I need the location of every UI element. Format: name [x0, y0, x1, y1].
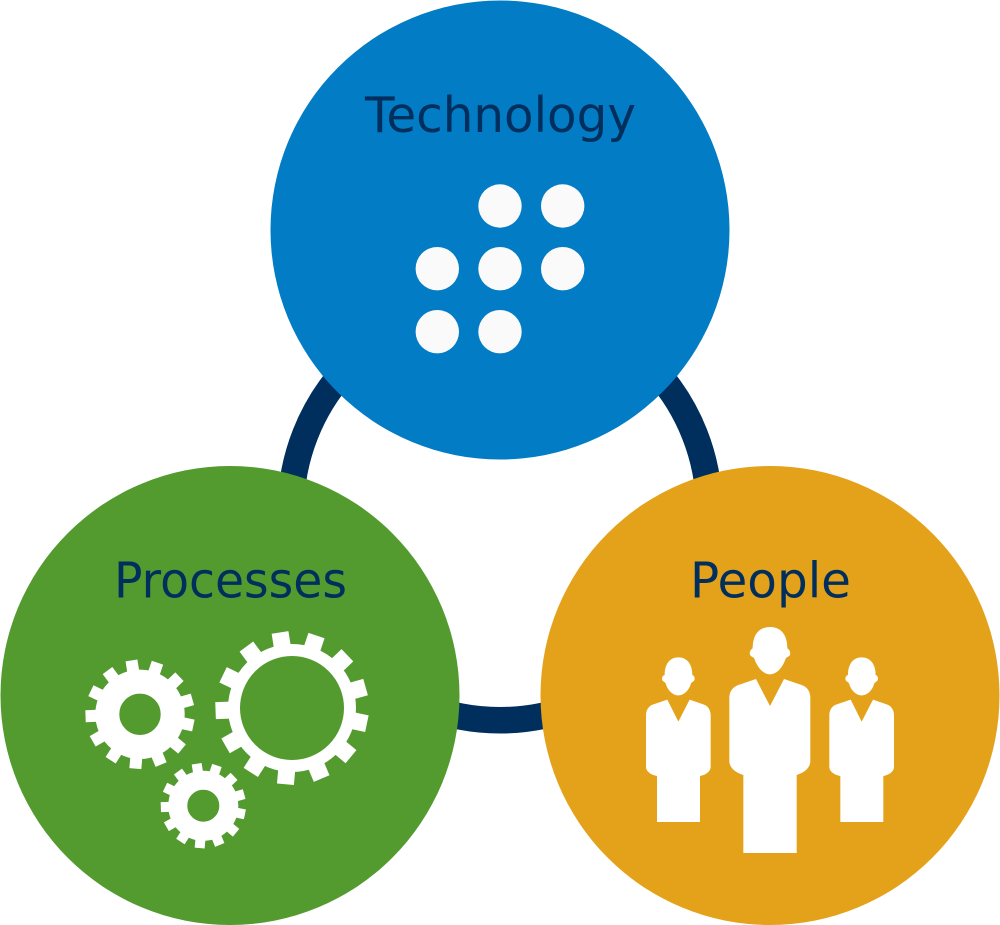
- people circle: [540, 466, 1000, 925]
- icon: large gear: [215, 631, 369, 785]
- panel: technology: [270, 0, 730, 460]
- panel: people: [540, 466, 1000, 925]
- icon: three people: [646, 627, 894, 853]
- processes heading: Processes: [114, 552, 347, 610]
- processes circle: [0, 466, 460, 925]
- icon: seven dots: [416, 184, 584, 353]
- person: right: [829, 657, 894, 822]
- panel: processes: [0, 466, 460, 925]
- connecting ring: [291, 302, 709, 720]
- icon: medium gear: [85, 660, 195, 769]
- technology heading: Technology: [364, 87, 636, 144]
- technology circle: [270, 0, 730, 460]
- person: centre: [729, 627, 810, 853]
- icon: small gear: [161, 763, 246, 848]
- people heading: People: [690, 552, 851, 610]
- person: left: [646, 657, 711, 822]
